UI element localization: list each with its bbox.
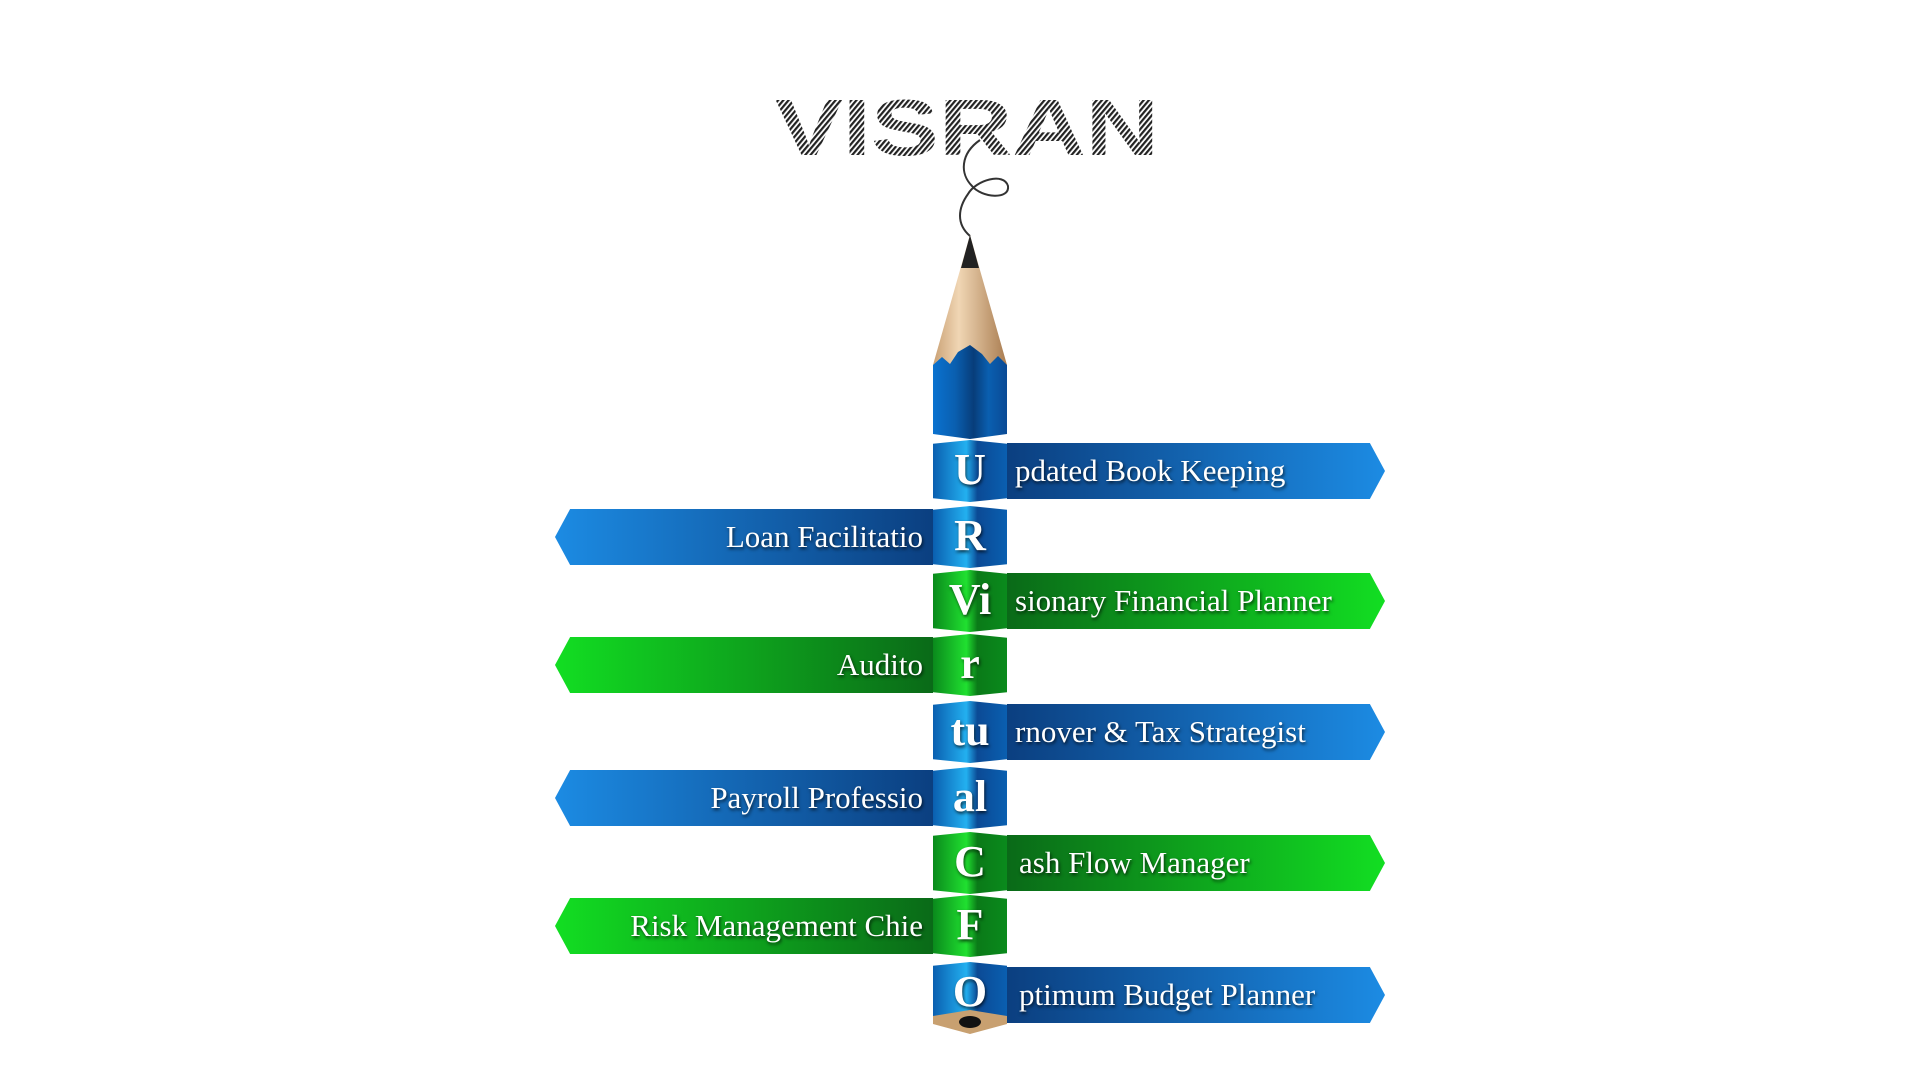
text: r — [960, 639, 980, 688]
text: Audito — [837, 647, 923, 682]
pencil: string, tip, wood and body — [933, 139, 1010, 439]
text: pdated Book Keeping — [1015, 453, 1285, 488]
text: Risk Management Chie — [630, 908, 923, 943]
text: O — [953, 967, 987, 1016]
text: ash Flow Manager — [1019, 845, 1250, 880]
text: Loan Facilitatio — [726, 519, 923, 554]
text: rnover & Tax Strategist — [1015, 714, 1306, 749]
text: tu — [950, 706, 990, 755]
text: al — [953, 772, 987, 821]
text: Vi — [949, 575, 991, 624]
text: F — [957, 900, 983, 949]
text: ptimum Budget Planner — [1019, 977, 1315, 1012]
text: Payroll Professio — [710, 780, 923, 815]
pencil end cap — [933, 1010, 1007, 1034]
text: C — [954, 837, 986, 886]
text: R — [954, 511, 986, 560]
text: U — [954, 445, 986, 494]
text: sionary Financial Planner — [1015, 583, 1332, 618]
